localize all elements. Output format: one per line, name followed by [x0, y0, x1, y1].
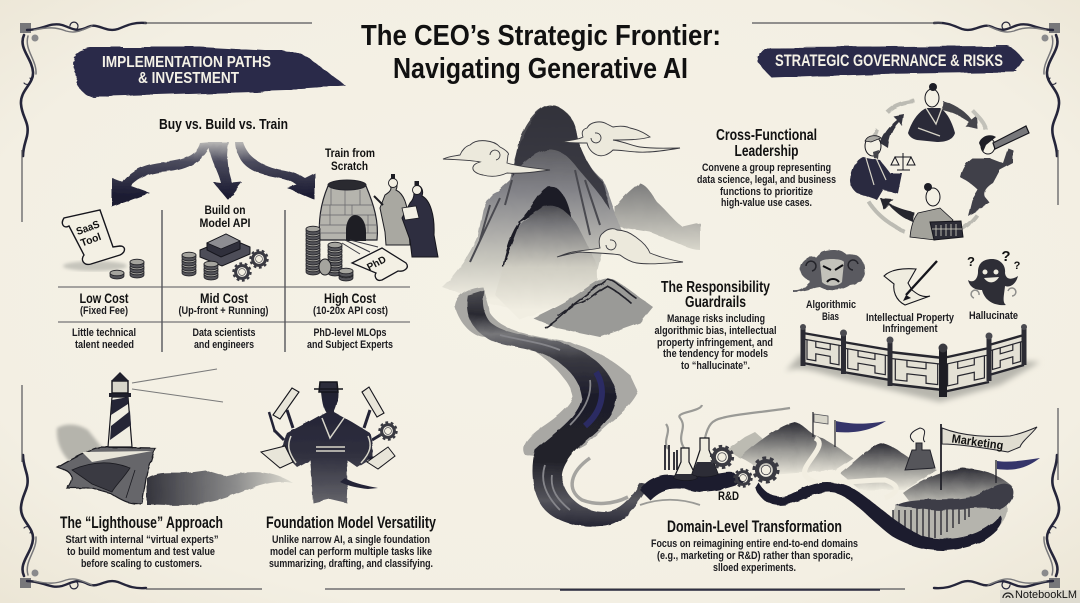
landscape hills	[727, 422, 1013, 515]
text: domain description: slloed experiments.	[713, 562, 796, 574]
text: lighthouse description: to build momentum and test value	[67, 546, 215, 558]
flag: marketing: Marketing	[951, 431, 1004, 453]
heading: cross-functional leadership	[716, 127, 817, 160]
talent: data scientists: Data scientists	[192, 327, 256, 339]
icon: layered chip, coins and gears	[182, 234, 267, 280]
icon: SaaS scroll and coins: Tool	[79, 231, 103, 249]
mountain streaks	[470, 170, 600, 262]
heading banner: implementation paths	[73, 47, 345, 97]
inner mountain	[495, 187, 598, 320]
label: intellectual property infringement	[866, 312, 955, 335]
diagram: leadership cycle	[850, 83, 1029, 240]
text: cross-functional description: Convene a group representing	[702, 162, 831, 174]
cost: mid: Mid Cost	[200, 290, 248, 306]
inner mountain ridges	[503, 187, 570, 267]
person: left with scales	[850, 136, 915, 200]
heading: responsibility guardrails: Guardrails	[685, 294, 746, 311]
river light streaks	[500, 335, 590, 510]
heading banner: implementation paths: IMPLEMENTATION PATHS	[102, 54, 271, 71]
panel: implementation paths and investment	[58, 47, 438, 352]
title: Navigating Generative AI	[393, 53, 688, 85]
text: foundation model description: model can perform multiple tasks like	[270, 546, 432, 558]
river indigo highlight	[585, 372, 602, 426]
branching arrows	[112, 142, 315, 207]
column: SaaS tool	[62, 210, 144, 351]
cost detail: 10-20x API cost: (10-20x API cost)	[313, 305, 388, 317]
heading: cross-functional leadership: Leadership	[734, 143, 798, 160]
icon: kiln	[319, 180, 378, 254]
NotebookLM badge	[1000, 589, 1080, 603]
icon: gears	[712, 447, 777, 486]
icon: coin stacks	[306, 226, 353, 281]
label: train from scratch: Scratch	[331, 159, 368, 173]
title: The CEO’s Strategic Frontier:	[361, 20, 721, 52]
talent: little technical talent: Little technical	[72, 327, 136, 339]
icon: scholars in robes	[374, 174, 438, 257]
river dark core	[467, 290, 650, 527]
icon: PhD scroll: PhD	[365, 254, 388, 273]
icon: hallucinating ghost: ?	[1001, 248, 1011, 265]
label: algorithmic bias: Bias	[822, 311, 839, 323]
icon: many-armed scholar figure	[261, 382, 396, 503]
text: guardrails description	[654, 313, 776, 372]
under-ribbon light streak	[640, 500, 700, 505]
panel: domain-level transformation	[640, 405, 1040, 574]
cycle arrows	[869, 101, 986, 232]
talent: data scientists: and engineers	[194, 339, 254, 351]
distant right mountain	[615, 183, 700, 250]
talent: little technical talent	[72, 327, 136, 351]
label: train from scratch	[325, 146, 375, 173]
heading: domain-level transformation: Domain-Level Transformation	[667, 518, 842, 536]
river wash	[455, 287, 638, 458]
heading: responsibility guardrails: The Responsibility	[661, 279, 770, 296]
person: bottom with abacus	[910, 183, 963, 240]
cost: high: High Cost	[324, 290, 376, 306]
lower bank wash	[890, 500, 1008, 545]
column: build on model API	[178, 203, 269, 351]
icon: PhD scroll	[352, 248, 407, 280]
flag: marketing	[941, 424, 1037, 490]
label: R&D: R&D	[718, 491, 739, 503]
text: lighthouse description: before scaling to customers.	[81, 558, 202, 570]
text: guardrails description: to “hallucinate”.	[681, 360, 750, 372]
cost detail: fixed fee: (Fixed Fee)	[80, 305, 128, 317]
lower cloud	[557, 229, 683, 264]
mountain dark ridge	[512, 105, 610, 210]
text: guardrails description: the tendency for models	[663, 348, 768, 360]
panel: foundation model versatility	[261, 382, 437, 570]
text: domain description	[651, 538, 858, 574]
talent: PhD-level MLOps: and Subject Experts	[307, 339, 393, 351]
icon: lab flasks and tubes	[665, 405, 790, 480]
person: top	[908, 83, 955, 142]
comparison table grid	[58, 210, 410, 352]
cost detail: up-front and running: (Up-front + Running)	[178, 305, 269, 317]
text: guardrails description: algorithmic bias, intellectual	[654, 325, 776, 337]
heading: responsibility guardrails	[661, 279, 770, 311]
label: hallucinate: Hallucinate	[969, 310, 1018, 322]
text: foundation model description: summarizing, drafting, and classifying.	[269, 558, 433, 570]
icon: hallucinating ghost: ?	[967, 254, 975, 269]
text: domain description: (e.g., marketing or R&D) rather than sporadic,	[657, 550, 853, 562]
label: intellectual property infringement: Infringement	[882, 323, 938, 335]
flag: navy pennant	[996, 458, 1040, 483]
heading: buy vs build vs train: Buy vs. Build vs. Train	[159, 116, 288, 133]
text: cross-functional description: high-value use cases.	[721, 197, 812, 209]
heading: foundation model versatility: Foundation Model Versatility	[266, 514, 437, 532]
talent: little technical talent: talent needed	[75, 339, 134, 351]
NotebookLM badge: NotebookLM	[1015, 589, 1077, 601]
splash stroke	[572, 458, 628, 503]
icon: SaaS scroll and coins	[62, 210, 144, 279]
text: guardrails description: Manage risks including	[667, 313, 765, 325]
label: build on model API: Build on	[204, 203, 246, 217]
heading: cross-functional leadership: Cross-Functional	[716, 127, 817, 144]
text: cross-functional description: data science, legal, and business	[697, 174, 836, 186]
icon: hallucinating ghost	[967, 248, 1021, 305]
text: cross-functional description: functions to prioritize	[720, 186, 813, 198]
text: domain description: Focus on reimagining entire end-to-end domains	[651, 538, 858, 550]
river ribbons	[640, 472, 1013, 550]
talent: PhD-level MLOps: PhD-level MLOps	[314, 327, 386, 339]
icon: storm cloud for algorithmic bias	[793, 250, 865, 292]
talent: data scientists	[192, 327, 256, 351]
text: lighthouse description	[66, 534, 218, 570]
railing on lower riverbank	[893, 507, 969, 539]
heading: lighthouse approach: The “Lighthouse” Approach	[60, 514, 223, 532]
central ink mountain and river	[442, 105, 700, 527]
text: foundation model description: Unlike narrow AI, a single foundation	[272, 534, 430, 546]
panel: lighthouse approach	[57, 369, 293, 570]
icon: lighthouse on cliff	[57, 369, 293, 505]
block: responsibility guardrails	[654, 279, 776, 372]
icon: hallucinating ghost: ?	[1014, 260, 1021, 272]
heading banner: strategic governance: STRATEGIC GOVERNANCE & RISKS	[775, 52, 1003, 70]
person: right with telescope	[960, 126, 1029, 216]
panel: strategic governance and risks	[654, 46, 1040, 402]
heading banner: implementation paths: & INVESTMENT	[138, 70, 239, 87]
text: lighthouse description: Start with internal “virtual experts”	[66, 534, 218, 546]
main mountain	[442, 105, 622, 310]
icon: factory	[905, 428, 935, 470]
label: train from scratch: Train from	[325, 146, 375, 160]
small mountain	[533, 278, 653, 337]
winding white path	[804, 438, 896, 498]
column: train from scratch	[306, 146, 438, 351]
talent: PhD-level MLOps	[307, 327, 393, 351]
flags: small	[813, 412, 886, 447]
icon: SaaS scroll and coins: SaaS	[75, 218, 101, 238]
label: algorithmic bias	[806, 299, 856, 323]
right cloud	[562, 122, 680, 156]
label: build on model API: Model API	[200, 216, 250, 230]
cost: low: Low Cost	[80, 290, 129, 306]
text: guardrails description: property infringement, and	[657, 337, 773, 349]
text: foundation model description	[269, 534, 433, 570]
text: cross-functional description	[697, 162, 836, 209]
guardrail fence	[785, 324, 1040, 402]
heading banner: strategic governance	[757, 46, 1024, 78]
label: build on model API	[200, 203, 250, 230]
block: cross-functional leadership	[697, 127, 836, 209]
label: intellectual property infringement: Intellectual Property	[866, 312, 955, 324]
icon: torn scroll and brush	[884, 261, 937, 305]
left cloud	[443, 141, 550, 176]
title	[361, 20, 721, 85]
label: algorithmic bias: Algorithmic	[806, 299, 856, 311]
